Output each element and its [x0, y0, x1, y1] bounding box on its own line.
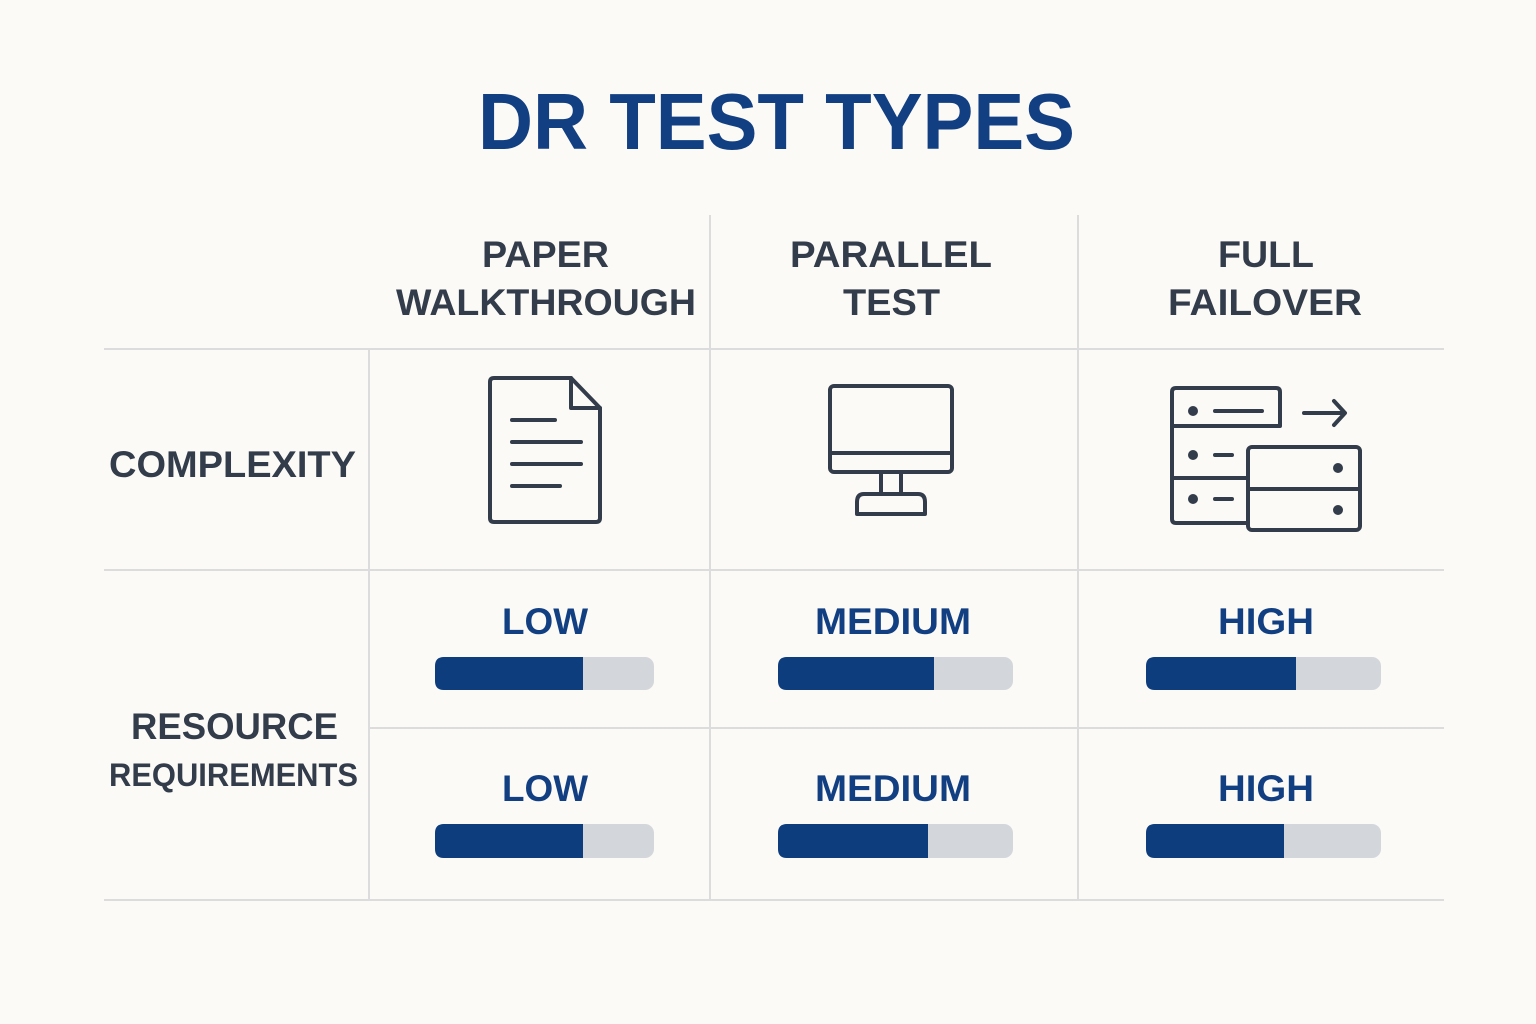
row labels: COMPLEXITY — [109, 444, 356, 485]
column headers: FULL — [1218, 234, 1314, 275]
row labels: RESOURCE — [131, 706, 338, 747]
column headers — [396, 234, 1362, 323]
icon: server failover — [1172, 388, 1360, 530]
column headers: PAPER — [482, 234, 609, 275]
icon: document — [490, 378, 600, 522]
level labels — [502, 601, 1314, 809]
row labels: REQUIREMENTS — [109, 757, 358, 793]
bars — [435, 657, 1381, 858]
column headers: FAILOVER — [1168, 282, 1362, 323]
level labels: LOW — [502, 601, 588, 642]
level labels: LOW — [502, 768, 588, 809]
level labels: HIGH — [1218, 601, 1314, 642]
column headers: WALKTHROUGH — [396, 282, 696, 323]
column headers: PARALLEL — [790, 234, 992, 275]
title: DR TEST TYPES — [478, 77, 1075, 166]
level labels: HIGH — [1218, 768, 1314, 809]
icon: monitor — [830, 386, 952, 514]
level labels: MEDIUM — [815, 601, 971, 642]
column headers: TEST — [843, 282, 940, 323]
level labels: MEDIUM — [815, 768, 971, 809]
row labels — [109, 444, 358, 793]
